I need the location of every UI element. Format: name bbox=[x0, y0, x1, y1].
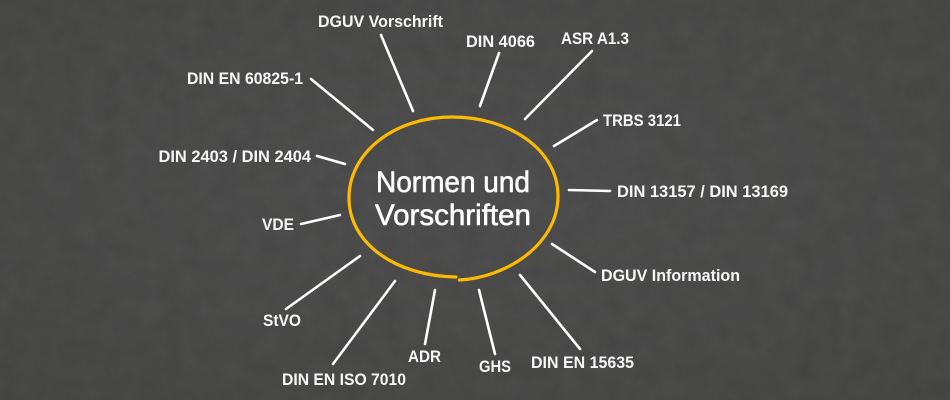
title bbox=[375, 166, 531, 232]
spoke: ASR A1.3: ASR A1.3 bbox=[561, 30, 629, 48]
spoke: StVO bbox=[263, 256, 360, 330]
spoke: TRBS 3121: TRBS 3121 bbox=[603, 112, 681, 130]
spoke: DIN 4066: DIN 4066 bbox=[466, 33, 535, 51]
spoke: ADR bbox=[408, 290, 441, 366]
title: Normen und bbox=[376, 166, 530, 199]
spoke: TRBS 3121 bbox=[554, 112, 681, 146]
spoke: ASR A1.3 bbox=[525, 30, 629, 119]
spoke: DIN 2403 / DIN 2404: DIN 2403 / DIN 2404 bbox=[158, 148, 312, 166]
spoke: DIN EN 15635: DIN EN 15635 bbox=[531, 354, 634, 372]
spoke: GHS: GHS bbox=[479, 358, 511, 376]
central hand-drawn circle bbox=[349, 117, 558, 280]
spoke: StVO: StVO bbox=[263, 312, 301, 330]
spoke: DIN 13157 / DIN 13169: DIN 13157 / DIN 13169 bbox=[617, 183, 788, 201]
spoke: DIN EN 60825-1: DIN EN 60825-1 bbox=[187, 70, 303, 88]
spoke: GHS bbox=[479, 290, 511, 376]
spoke: DIN EN ISO 7010 bbox=[282, 281, 406, 389]
spoke: DIN EN 15635 bbox=[520, 275, 634, 372]
spoke: DGUV Information bbox=[552, 244, 740, 285]
spoke: DGUV Vorschrift: DGUV Vorschrift bbox=[318, 13, 443, 31]
spoke: VDE: VDE bbox=[262, 216, 294, 234]
spoke: VDE bbox=[262, 215, 340, 234]
spoke: DGUV Information: DGUV Information bbox=[601, 267, 740, 285]
spoke: DGUV Vorschrift bbox=[318, 13, 443, 111]
spoke: DIN EN 60825-1 bbox=[187, 70, 373, 130]
spoke: DIN 4066 bbox=[466, 33, 535, 106]
title: Vorschriften bbox=[375, 199, 531, 232]
spoke: ADR: ADR bbox=[408, 348, 441, 366]
spoke: DIN EN ISO 7010: DIN EN ISO 7010 bbox=[282, 371, 406, 389]
